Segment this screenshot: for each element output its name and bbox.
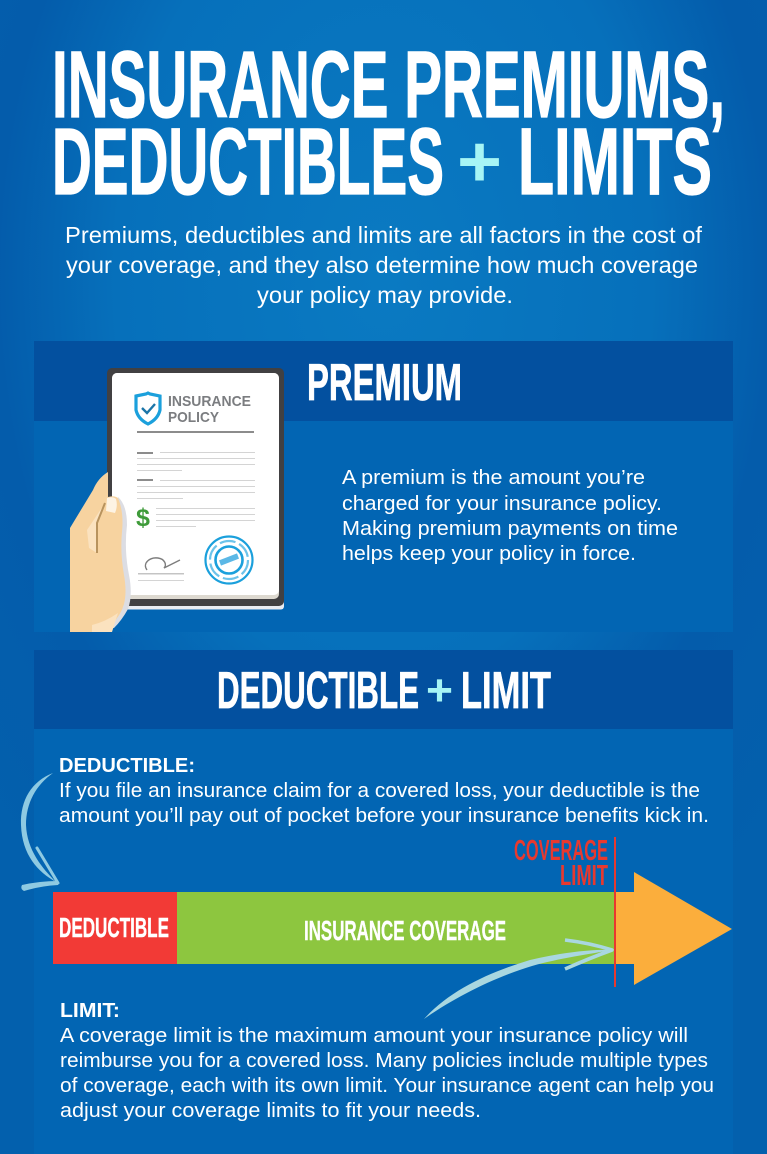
arrow: limit pointer — [424, 940, 612, 1019]
arrow: deductible pointer — [21, 773, 58, 891]
limit text — [60, 999, 714, 1122]
bar: deductible segment: DEDUCTIBLE — [59, 912, 169, 943]
coverage bar chart — [53, 835, 732, 987]
bar: orange arrow — [615, 872, 732, 985]
premium description: Making premium payments on time — [342, 518, 678, 540]
icon: signature — [145, 558, 180, 570]
icon: hand — [70, 472, 131, 632]
policy heading: POLICY — [168, 409, 219, 426]
premium description: charged for your insurance policy. — [342, 493, 662, 515]
icon: stamp seal — [206, 536, 252, 584]
limit text: adjust your coverage limits to fit your needs. — [60, 1099, 481, 1122]
deductible text: DEDUCTIBLE: — [59, 754, 195, 777]
limit text: of coverage, each with its own limit. Your insurance agent can help you — [60, 1074, 714, 1097]
heading: deductible + limit: LIMIT — [461, 662, 551, 720]
deductible text: amount you’ll pay out of pocket before your insurance benefits kick in. — [59, 804, 709, 827]
document lines — [137, 452, 255, 581]
deductible text: If you file an insurance claim for a covered loss, your deductible is the — [59, 779, 700, 802]
heading: deductible + limit: + — [426, 666, 453, 715]
premium description: helps keep your policy in force. — [342, 543, 636, 565]
policy heading — [168, 393, 251, 426]
bar: insurance coverage segment: INSURANCE COVERAGE — [304, 915, 506, 946]
icon: insurance policy tablet held in hand — [70, 368, 284, 632]
coverage limit marker: LIMIT — [560, 860, 608, 892]
limit text: A coverage limit is the maximum amount your insurance policy will — [60, 1024, 688, 1047]
premium description — [342, 467, 678, 565]
icon: dollar sign: $ — [136, 504, 150, 532]
coverage limit marker: COVERAGE — [514, 835, 608, 867]
title: DEDUCTIBLES — [52, 109, 444, 215]
limit text: reimburse you for a covered loss. Many policies include multiple types — [60, 1049, 708, 1072]
bar: deductible segment — [53, 892, 177, 964]
premium description: A premium is the amount you’re — [342, 467, 645, 489]
title: + — [457, 122, 502, 202]
deductible text — [59, 754, 709, 827]
policy heading: INSURANCE — [168, 393, 251, 410]
icon: shield — [136, 393, 160, 424]
intro text: your coverage, and they also determine how much coverage — [66, 252, 698, 278]
intro text: your policy may provide. — [257, 282, 513, 308]
intro text: Premiums, deductibles and limits are all factors in the cost of — [65, 222, 703, 248]
panel: deductible + limit — [34, 650, 733, 1154]
title — [52, 32, 725, 215]
coverage limit marker — [514, 835, 616, 987]
heading: deductible + limit: DEDUCTIBLE — [217, 662, 419, 720]
intro text — [65, 222, 703, 308]
limit text: LIMIT: — [60, 999, 120, 1022]
heading: premium: PREMIUM — [307, 354, 462, 412]
bar: insurance coverage segment — [177, 892, 615, 964]
panel: premium — [34, 341, 733, 632]
